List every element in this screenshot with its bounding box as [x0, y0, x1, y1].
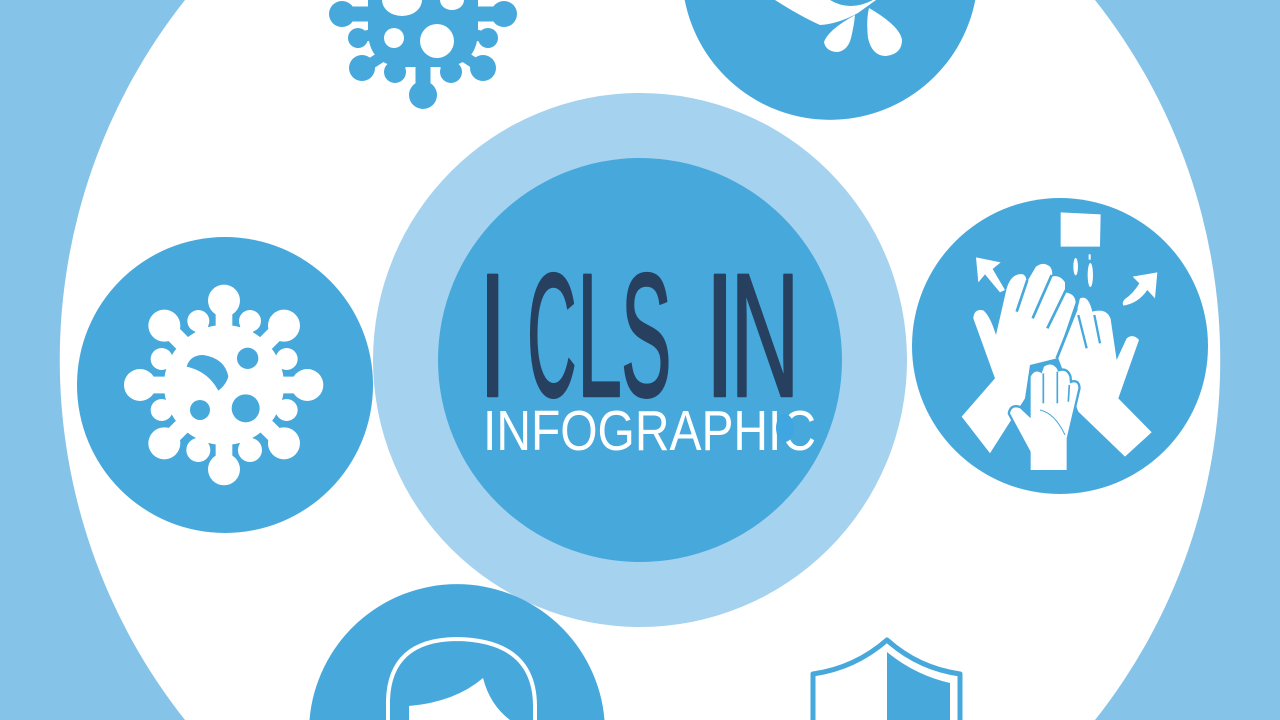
title: L: [577, 238, 622, 435]
icon: face: [409, 678, 510, 720]
icon: arrow right: [1123, 272, 1157, 306]
badge disc: [310, 584, 604, 720]
front hand: [1010, 365, 1078, 470]
centre ring: [373, 93, 907, 627]
title: C: [527, 238, 577, 434]
panel: face mask badge: [310, 584, 604, 720]
icon: soap dispenser: [1061, 212, 1101, 287]
icon: virus top: [329, 0, 517, 109]
left hand: [962, 264, 1077, 453]
icon: washing hands: [962, 212, 1157, 470]
title: S: [621, 236, 671, 434]
badge disc: [77, 237, 373, 533]
right hand: [1058, 298, 1152, 457]
panel: virus badge: [77, 237, 373, 533]
icon: hand and drops: [775, 0, 902, 56]
badge disc: [912, 198, 1208, 494]
subtitle blot: [776, 414, 794, 442]
icon: arrow left: [976, 257, 1005, 292]
panel: hand washing badge: [912, 198, 1208, 494]
title: I: [478, 237, 507, 434]
badge disc: [685, 0, 975, 120]
icon: shield: [813, 640, 960, 720]
icon: virus: [124, 285, 323, 485]
panel: washing badge top: [685, 0, 975, 120]
subtitle: INFOGRAPHIC: [483, 399, 816, 463]
title: [478, 236, 800, 435]
title: N: [730, 237, 800, 434]
centre disc: [438, 158, 842, 562]
title: I: [704, 238, 736, 434]
icon: head outline: [388, 639, 535, 720]
